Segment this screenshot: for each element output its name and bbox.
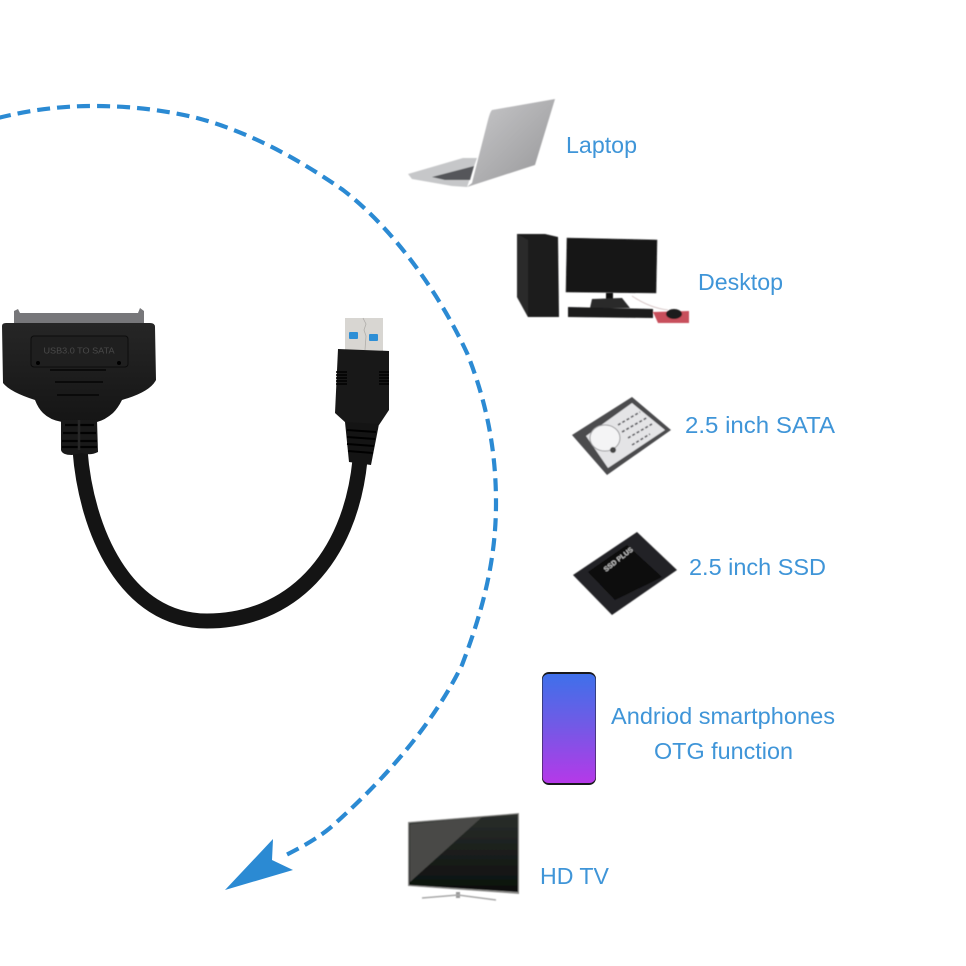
keyboard xyxy=(568,307,653,318)
label: 2.5 inch SSD: 2.5 inch SSD xyxy=(689,554,826,580)
label: Laptop: Laptop xyxy=(566,132,637,158)
icon: laptop xyxy=(408,99,555,187)
icon: 2.5 inch SATA hard drive xyxy=(572,397,671,475)
mouse pad xyxy=(653,311,689,323)
USB 3.0 to SATA adapter cable xyxy=(2,308,389,621)
USB plug xyxy=(335,318,389,465)
icon: 2.5 inch SSD xyxy=(573,532,677,615)
label: Andriod smartphones OTG function: Andriod smartphones xyxy=(611,703,835,729)
label: Andriod smartphones OTG function: OTG function xyxy=(654,738,793,764)
connector label: USB3.0 TO SATA xyxy=(44,345,115,355)
dashed arc arrow xyxy=(0,106,496,890)
SSD label: SSD PLUS xyxy=(603,546,635,574)
icon: desktop computer xyxy=(517,234,689,323)
cable xyxy=(80,450,360,621)
label: Andriod smartphones OTG function xyxy=(611,703,835,764)
tower xyxy=(517,234,559,317)
icon: HD TV xyxy=(408,813,519,900)
label: Desktop: Desktop xyxy=(698,269,783,295)
arrow head xyxy=(225,839,293,890)
SATA connector xyxy=(2,308,156,455)
label: 2.5 inch SATA: 2.5 inch SATA xyxy=(685,412,836,438)
monitor xyxy=(566,238,657,293)
icon: smartphone xyxy=(542,672,596,785)
label: HD TV: HD TV xyxy=(540,863,610,889)
